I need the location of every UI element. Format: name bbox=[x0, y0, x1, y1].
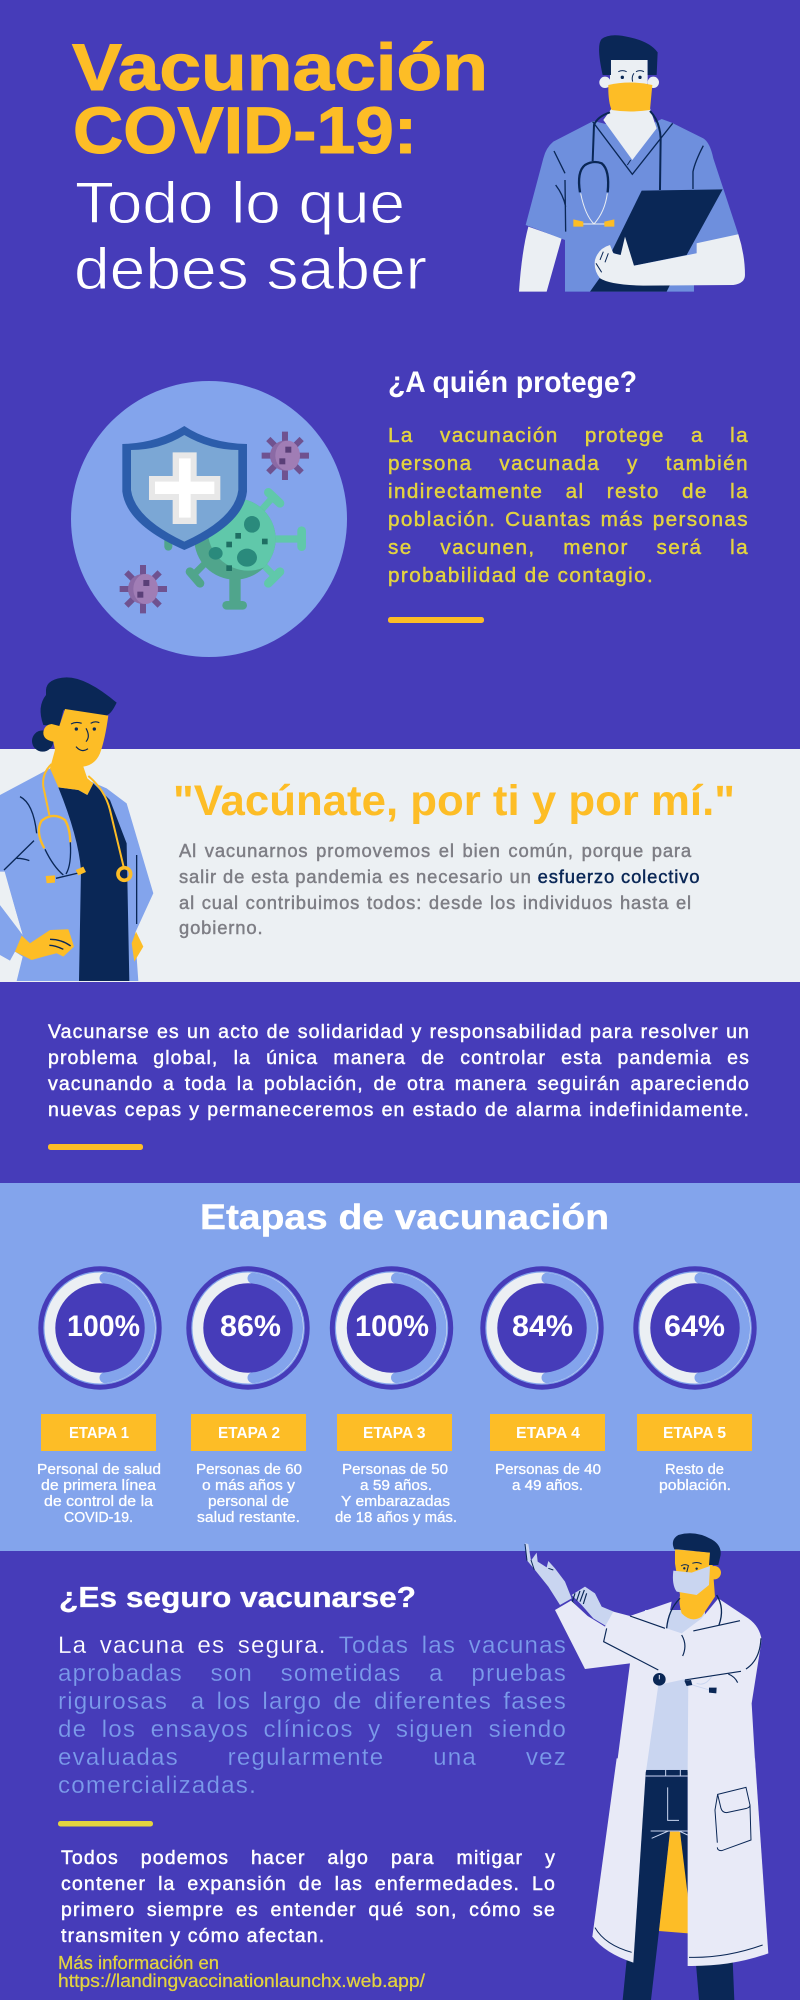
stage 5 bbox=[636, 1269, 754, 1494]
panel: hero bbox=[72, 30, 745, 302]
stage 2: Personas de 60 bbox=[196, 1461, 302, 1478]
stage 4: ETAPA 4 bbox=[516, 1425, 580, 1442]
text block: protection explanation bbox=[388, 424, 749, 587]
stage 2: o más años y bbox=[202, 1477, 296, 1494]
illustration: female doctor bbox=[0, 677, 153, 981]
heading: etapas: Etapas de vacunación bbox=[200, 1198, 609, 1237]
stage 2: personal de bbox=[208, 1493, 289, 1510]
stage 5: población. bbox=[659, 1477, 731, 1494]
more information link: Más información en bbox=[58, 1953, 219, 1973]
stage 2: salud restante. bbox=[197, 1509, 300, 1526]
illustration: shield and virus circle bbox=[71, 381, 347, 657]
text block: everyone can help: Todos podemos hacer algo para mitigar y bbox=[61, 1847, 556, 1869]
heading: quote: "Vacúnate, por ti y por mí." bbox=[173, 777, 735, 825]
stage 3: ETAPA 3 bbox=[363, 1425, 426, 1442]
stage 2: ETAPA 2 bbox=[218, 1425, 280, 1442]
panel: quote bbox=[0, 677, 800, 982]
stage 1: COVID-19. bbox=[64, 1509, 133, 1526]
text block: solidarity: Vacunarse es un acto de solidaridad y responsabilidad para resolver un bbox=[48, 1021, 750, 1043]
text block: common good bbox=[178, 840, 700, 938]
stage 3: a 59 años. bbox=[360, 1477, 432, 1494]
text block: solidarity bbox=[48, 1021, 750, 1121]
panel: es seguro vacunarse bbox=[58, 1533, 768, 2000]
stage 1: ETAPA 1 bbox=[69, 1425, 129, 1442]
text block: protection explanation: persona vacunada y también bbox=[388, 452, 749, 475]
title: Todo lo que bbox=[75, 171, 405, 236]
text block: protection explanation: se vacunen, menor será la bbox=[388, 536, 749, 559]
panel: solidarity text bbox=[48, 1021, 750, 1150]
text block: common good: Al vacunarnos promovemos el bien común, porque para bbox=[179, 840, 692, 861]
text block: everyone can help bbox=[61, 1847, 556, 1947]
text block: vaccine is safe: aprobadas son sometidas a pruebas bbox=[58, 1660, 567, 1687]
illustration: doctor with clipboard bbox=[519, 35, 745, 292]
accent bar bbox=[48, 1144, 143, 1150]
stage 1: 100% bbox=[67, 1310, 140, 1343]
title: COVID-19: bbox=[73, 93, 417, 167]
panel: etapas de vacunación bbox=[0, 1183, 800, 1551]
heading: es seguro: ¿Es seguro vacunarse? bbox=[59, 1582, 416, 1614]
stage 5: Resto de bbox=[665, 1461, 724, 1478]
stage 5: 64% bbox=[664, 1310, 725, 1343]
text block: protection explanation: La vacunación protege a la bbox=[388, 424, 749, 447]
stage 5: ETAPA 5 bbox=[663, 1425, 726, 1442]
text block: vaccine is safe: La vacuna es segura. Todas las vacunas bbox=[58, 1632, 567, 1659]
stage 3: 100% bbox=[355, 1310, 429, 1343]
title: Vacunación bbox=[72, 30, 488, 104]
text block: protection explanation: población. Cuantas más personas bbox=[388, 508, 749, 531]
text block: everyone can help: transmiten y cómo afectan. bbox=[61, 1925, 325, 1947]
stage 1: Personal de salud bbox=[37, 1461, 161, 1478]
text block: vaccine is safe: comercializadas. bbox=[58, 1772, 257, 1799]
text block: protection explanation: indirectamente al resto de la bbox=[388, 480, 749, 503]
text block: vaccine is safe: evaluadas regularmente una vez bbox=[58, 1744, 567, 1771]
stage 1 bbox=[37, 1269, 161, 1526]
text block: common good: gobierno. bbox=[179, 917, 263, 938]
stage 3: de 18 años y más. bbox=[335, 1509, 457, 1526]
text block: vaccine is safe bbox=[58, 1632, 567, 1799]
accent bar bbox=[388, 617, 484, 623]
accent bar bbox=[58, 1821, 153, 1826]
text block: everyone can help: contener la expansión de las enfermedades. Lo bbox=[61, 1873, 556, 1895]
stage 1: de control de la bbox=[44, 1493, 154, 1510]
text block: solidarity: vacunando a toda la población, de otra manera seguirán apareciendo bbox=[48, 1073, 750, 1095]
text block: solidarity: nuevas cepas y permaneceremos en estado de alarma indefinidamente. bbox=[48, 1099, 750, 1121]
stage 4: 84% bbox=[512, 1310, 573, 1343]
text block: common good: al cual contribuimos todos: desde los individuos hasta el bbox=[179, 892, 692, 912]
heading: a quién protege: ¿A quién protege? bbox=[388, 366, 637, 399]
title: debes saber bbox=[74, 237, 427, 302]
stage 2: 86% bbox=[220, 1310, 281, 1343]
stage 3 bbox=[332, 1269, 457, 1526]
text block: everyone can help: primero siempre es entender qué son, cómo se bbox=[61, 1899, 556, 1921]
more information link: https://landingvaccinationlaunchx.web.app/ bbox=[58, 1971, 425, 1991]
text block: common good: salir de esta pandemia es necesario un esfuerzo colectivo bbox=[179, 866, 700, 887]
text block: vaccine is safe: de los ensayos clínicos y siguen siendo bbox=[58, 1716, 567, 1743]
stage 3: Y embarazadas bbox=[341, 1493, 450, 1510]
panel: a quién protege bbox=[71, 366, 749, 657]
text block: vaccine is safe: rigurosas a los largo de diferentes fases bbox=[58, 1688, 567, 1715]
stage 4: a 49 años. bbox=[512, 1477, 583, 1494]
stage 2 bbox=[189, 1269, 307, 1526]
stage 4: Personas de 40 bbox=[495, 1461, 601, 1478]
text block: protection explanation: probabilidad de contagio. bbox=[388, 564, 654, 587]
text block: solidarity: problema global, la única manera de controlar esta pandemia es bbox=[48, 1047, 750, 1069]
stage 4 bbox=[483, 1269, 605, 1494]
stage 3: Personas de 50 bbox=[342, 1461, 448, 1478]
stage 1: de primera línea bbox=[41, 1477, 157, 1494]
more information link bbox=[58, 1953, 425, 1991]
title bbox=[72, 30, 488, 302]
illustration: doctor in white coat bbox=[525, 1533, 768, 2000]
